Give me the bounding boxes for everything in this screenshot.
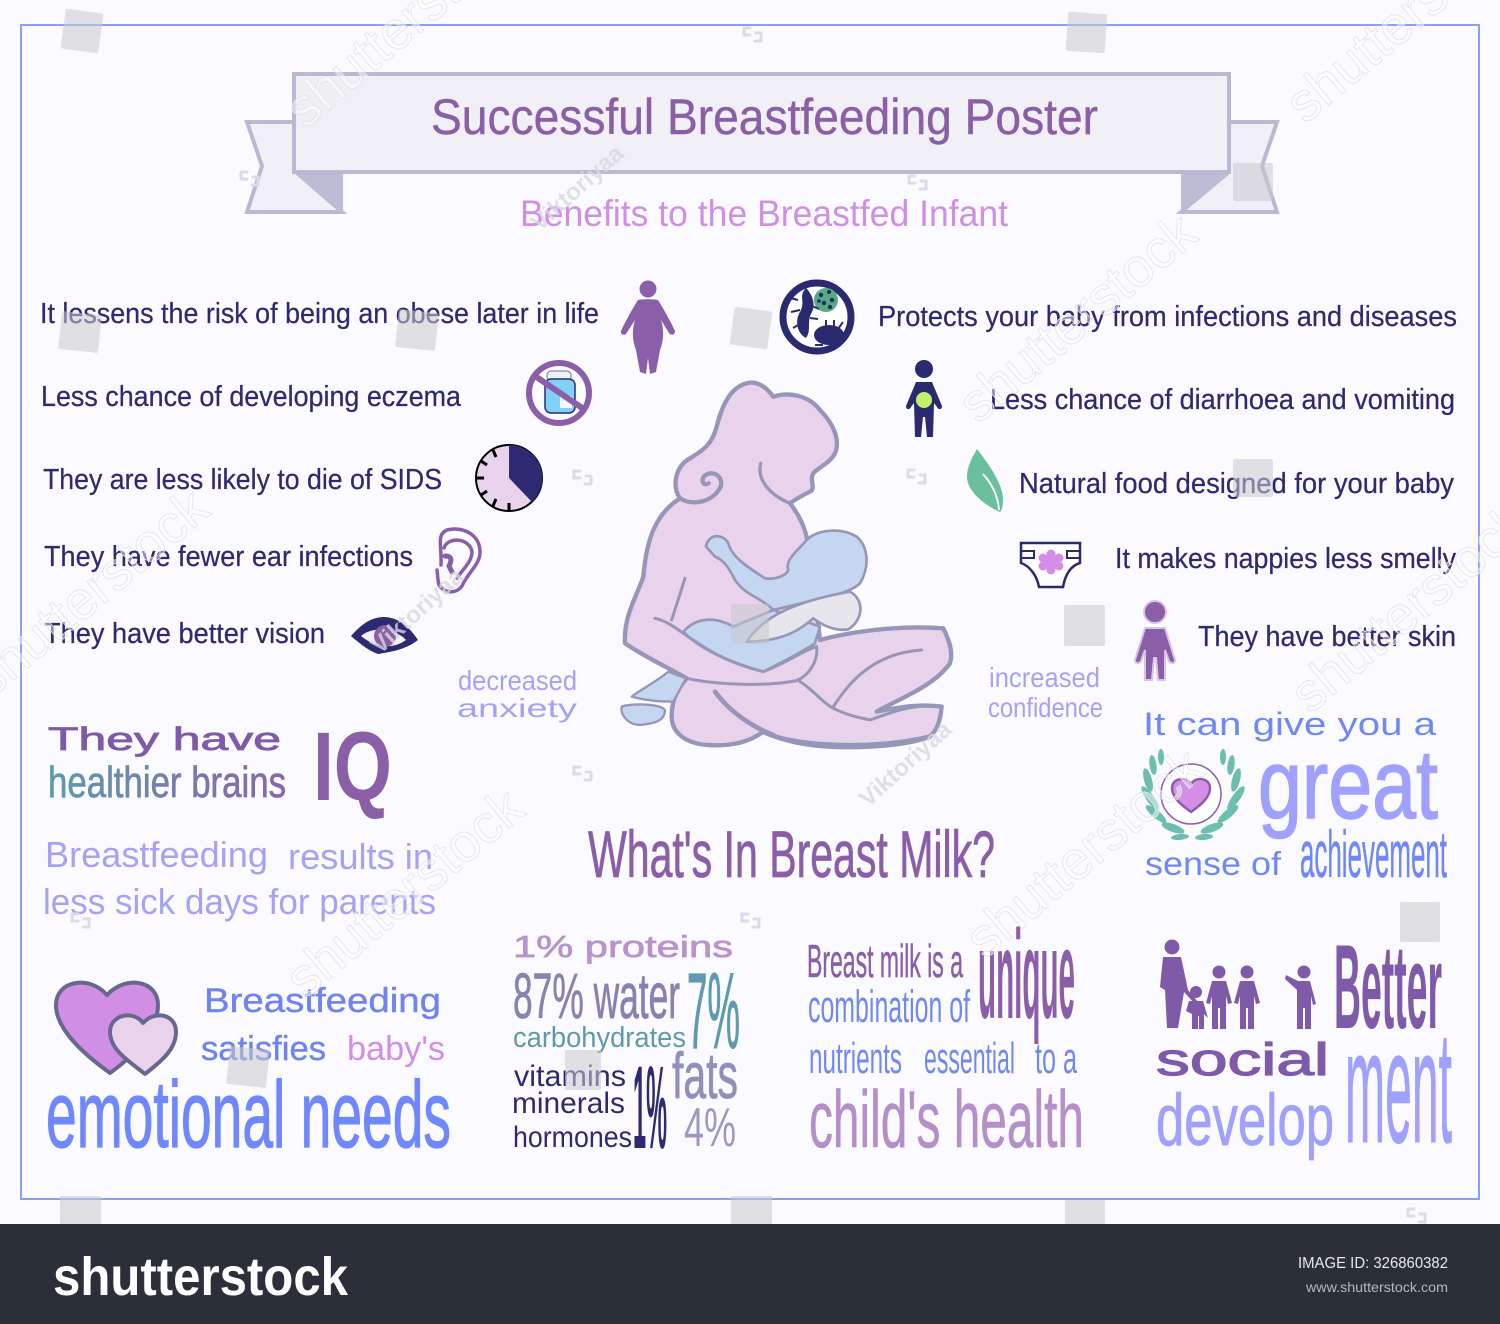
text block: sense of achievement: great [1258, 729, 1438, 839]
icon: germs [783, 283, 851, 351]
watermark text [0, 0, 1500, 1009]
baby feet [632, 672, 686, 702]
watermark text: shutterstock [947, 201, 1209, 434]
watermark text: shutterstock [954, 736, 1216, 969]
label: decreased anxiety [457, 665, 577, 723]
text block: unique combination: combination of [808, 981, 970, 1032]
benefit text: natural food: Natural food designed for your baby [1019, 468, 1454, 500]
icon: ear [437, 529, 480, 592]
watermark text: shutterstock [274, 776, 536, 1009]
label: decreased anxiety: decreased [458, 665, 577, 696]
chart: breast milk composition word stack: 1% proteins [513, 929, 733, 964]
illustration: mother and baby [621, 383, 951, 747]
panel: benefits list left [40, 298, 599, 650]
banner [247, 74, 1277, 212]
text block: unique combination [807, 904, 1084, 1165]
text block: sick days [43, 834, 436, 922]
chart: breast milk composition word stack: hormones [513, 1121, 632, 1154]
text block: unique combination: essential [924, 1034, 1015, 1083]
baby body [683, 610, 820, 672]
benefit text: ear infections: They have fewer ear infections [44, 541, 413, 573]
benefit text: infections: Protects your baby from infections and diseases [878, 301, 1457, 333]
text block: healthier brains IQ: IQ [313, 712, 392, 821]
icon: eye [351, 617, 418, 654]
text block: healthier brains IQ: healthier brains [48, 758, 286, 807]
benefit text: diarrhoea: Less chance of diarrhoea and vomiting [990, 384, 1455, 416]
benefit text: skin: They have better skin [1198, 621, 1456, 653]
arm and leg contours [655, 578, 942, 720]
chart: breast milk composition word stack: fats [672, 1039, 738, 1112]
footer logo: shutterstock [53, 1247, 349, 1307]
text block: sense of achievement: sense of [1145, 845, 1282, 882]
benefit text: obesity: It lessens the risk of being an obese later in life [40, 298, 599, 330]
benefit text: eczema: Less chance of developing eczema [41, 381, 462, 413]
icon: nappy [1021, 543, 1080, 587]
poster canvas: 7% [687, 950, 740, 1071]
icon: leaf [967, 449, 1003, 512]
icon: clock [476, 445, 542, 511]
icon: obese figure [621, 280, 675, 374]
footer bar [0, 1224, 1500, 1324]
watermark author: Viktoriyaa [854, 715, 957, 812]
text block: unique combination: nutrients [809, 1034, 902, 1083]
label: increased confidence: confidence [988, 692, 1103, 723]
title: Successful Breastfeeding Poster [431, 89, 1098, 145]
chart: breast milk composition word stack: 87% water [513, 960, 680, 1032]
chart: breast milk composition word stack: minerals [512, 1087, 625, 1120]
text block: emotional needs: emotional needs [46, 1062, 451, 1168]
chart: breast milk composition word stack: vitamins [514, 1060, 626, 1093]
text block: better social development: develop [1156, 1080, 1334, 1161]
text block: sense of achievement: It can give you a [1143, 706, 1436, 742]
footer url: www.shutterstock.com [1305, 1279, 1448, 1295]
chart: breast milk composition word stack: 1% [633, 1042, 667, 1174]
subtitle: Benefits to the Breastfed Infant [520, 193, 1009, 234]
label: increased confidence [988, 662, 1103, 723]
benefit text: vision: They have better vision [44, 618, 325, 650]
label: decreased anxiety: anxiety [457, 693, 577, 723]
icon: no bottle [529, 363, 589, 423]
crossed leg lower contour [715, 692, 930, 745]
baby head and arm [706, 531, 867, 610]
text block: sick days: less sick days for parents [43, 881, 436, 922]
hair neck curve [760, 463, 790, 503]
text block: better social development: social [1156, 1034, 1329, 1085]
text block: unique combination: child's health [809, 1075, 1084, 1165]
text block: better social development [1156, 920, 1452, 1176]
text block: sense of achievement [1143, 706, 1447, 891]
icon: child skin [1135, 601, 1175, 680]
benefit text: SIDS: They are less likely to die of SIDS [43, 464, 442, 496]
poster canvas: unique [978, 904, 1075, 1045]
icon: family silhouettes [1160, 940, 1316, 1029]
watermark author: Viktoriyaa [526, 139, 629, 236]
icon: child with belly [906, 360, 942, 437]
text block: emotional needs: satisfies [201, 1030, 326, 1068]
text block: healthier brains IQ [48, 712, 392, 821]
text block: sick days: Breastfeeding [45, 834, 268, 875]
text block: emotional needs: baby's [347, 1030, 445, 1068]
text block: emotional needs: Breastfeeding [204, 982, 441, 1020]
watermark author: Viktoriyaa [366, 562, 469, 659]
text block: emotional needs [46, 982, 451, 1168]
mother hand [747, 592, 860, 642]
icon: laurel wreath heart [1139, 749, 1247, 841]
panel: benefits list right [878, 301, 1457, 653]
chart: breast milk composition word stack: carbohydrates [513, 1022, 686, 1054]
text block: unique combination: to a [1035, 1034, 1077, 1083]
label: increased confidence: increased [989, 662, 1100, 693]
heading: what's in breast milk: What's In Breast Milk? [588, 817, 995, 891]
icon: two hearts [56, 983, 176, 1074]
footer image id: IMAGE ID: 326860382 [1298, 1255, 1448, 1272]
benefit text: nappies: It makes nappies less smelly [1115, 543, 1456, 575]
watermark author [366, 139, 957, 812]
chart: breast milk composition word stack: 4% [684, 1096, 736, 1158]
hair bun spiral [680, 473, 721, 502]
text block: unique combination: Breast milk is a [807, 935, 963, 987]
text block: sick days: results in [288, 836, 433, 877]
text block: healthier brains IQ: They have [48, 721, 281, 757]
chart: breast milk composition word stack [512, 929, 740, 1174]
